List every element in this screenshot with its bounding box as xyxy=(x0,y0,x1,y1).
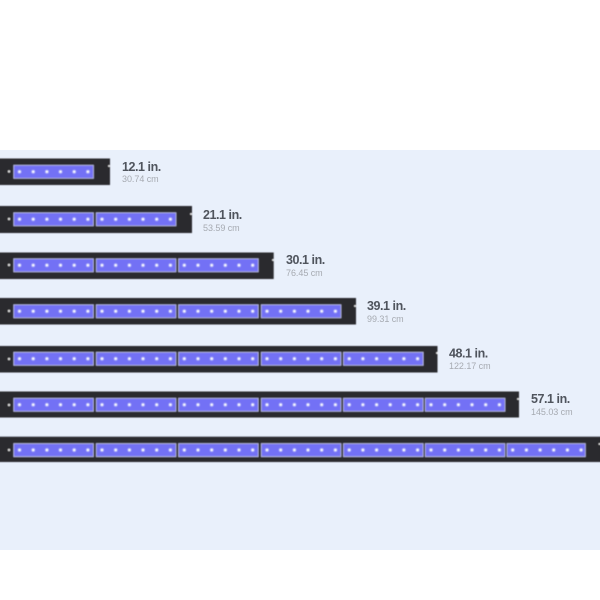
label: 12.1 in: 30.74 cm xyxy=(122,174,159,184)
label: 21.1 in: 53.59 cm xyxy=(203,223,240,233)
label: 48.1 in: 48.1 in. xyxy=(449,346,488,360)
light bar: 39.1 in xyxy=(0,298,356,324)
label: 48.1 in: 122.17 cm xyxy=(449,361,491,371)
label: 57.1 in xyxy=(531,392,573,417)
label: 48.1 in xyxy=(449,346,491,371)
light bar: 48.1 in xyxy=(0,346,438,372)
background panel xyxy=(0,150,600,550)
label: 57.1 in: 57.1 in. xyxy=(531,392,570,406)
label: 39.1 in: 99.31 cm xyxy=(367,314,404,324)
light bar: 12.1 in xyxy=(0,158,110,185)
label: 39.1 in: 39.1 in. xyxy=(367,299,406,313)
label: 30.1 in: 76.45 cm xyxy=(286,268,323,278)
light bar: cropped at right edge xyxy=(0,437,600,462)
light bar: 30.1 in xyxy=(0,252,274,279)
light bar: 21.1 in xyxy=(0,206,192,233)
label: 30.1 in: 30.1 in. xyxy=(286,253,325,267)
label: 39.1 in xyxy=(367,299,406,324)
label: 12.1 in: 12.1 in. xyxy=(122,160,161,174)
label: 12.1 in xyxy=(122,160,161,184)
label: 21.1 in: 21.1 in. xyxy=(203,208,242,222)
label: 57.1 in: 145.03 cm xyxy=(531,407,573,417)
label: 21.1 in xyxy=(203,208,242,233)
light bar: 57.1 in xyxy=(0,392,519,418)
label: 30.1 in xyxy=(286,253,325,278)
